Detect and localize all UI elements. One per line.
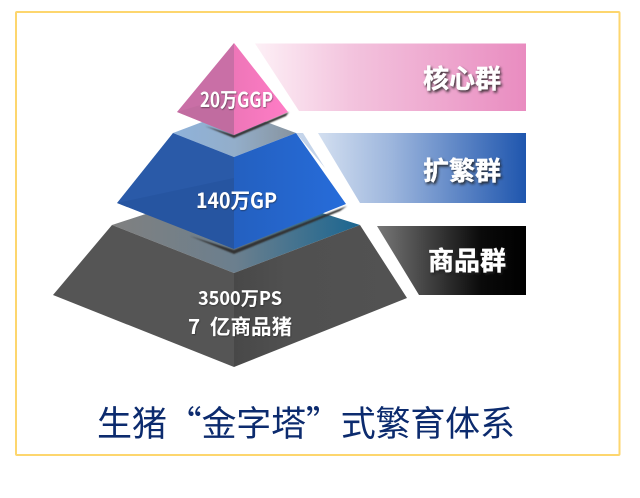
pyramid tier: bottom (gray): 3500万PS (198, 284, 282, 311)
banner: 核心群 (255, 44, 526, 111)
banner: 扩繁群 (318, 133, 526, 203)
pyramid tier: middle (blue) (117, 110, 347, 254)
pyramid tier: top (pink) (177, 43, 289, 138)
banner: 商品群 (377, 226, 526, 295)
pyramid tier: bottom (gray) (53, 185, 407, 367)
pyramid tier: bottom (gray): 亿商品猪 (210, 310, 292, 340)
title: 生猪“金字塔”式繁育体系 (97, 396, 515, 447)
pyramid tier: middle (blue): 140万GP (196, 185, 277, 215)
banner: 商品群: 商品群 (428, 246, 506, 276)
pyramid tier: top (pink): 20万GGP (200, 84, 273, 113)
pyramid tier: bottom (gray): 7 (188, 310, 200, 340)
banner: 扩繁群: 扩繁群 (423, 156, 501, 186)
banner: 核心群: 核心群 (423, 64, 501, 94)
